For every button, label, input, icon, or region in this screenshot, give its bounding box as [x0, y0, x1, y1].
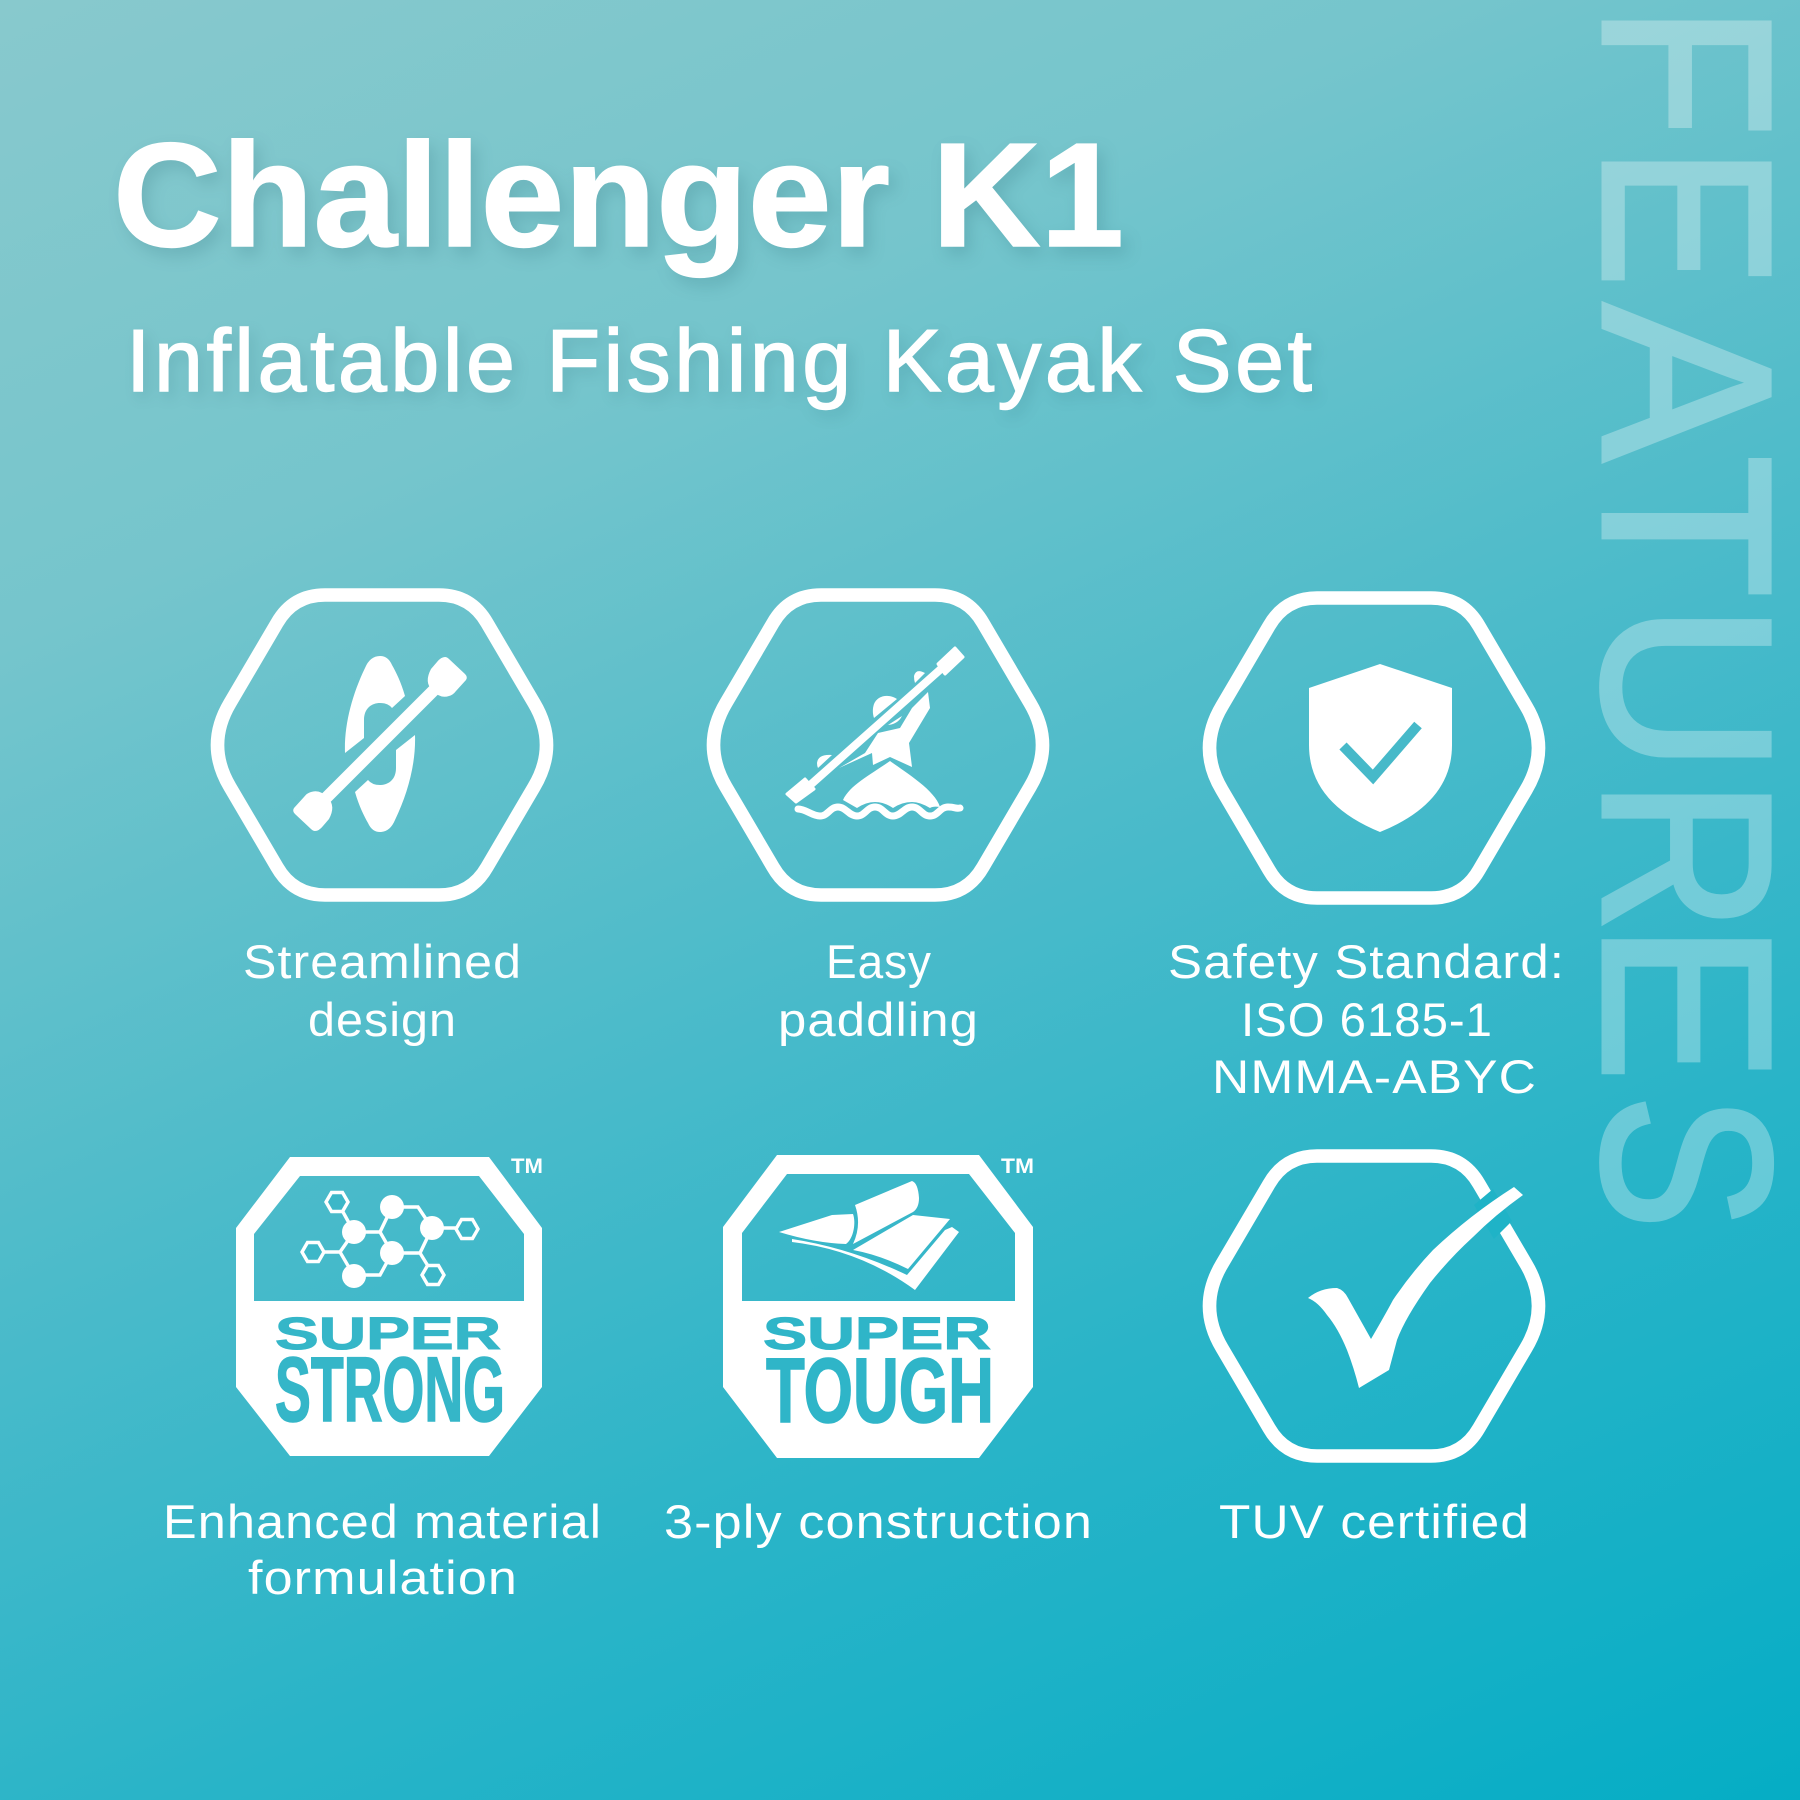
badge word: STRONG: STRONG	[275, 1339, 505, 1441]
icon: kayak and paddle	[218, 595, 546, 895]
label line 2: design	[308, 993, 457, 1046]
label line 2: paddling	[778, 993, 979, 1046]
vertical heading: FEATURES	[1552, 5, 1800, 1229]
icon: shield with check	[1210, 598, 1538, 898]
icon: paddler in kayak	[714, 595, 1042, 895]
feature: easy paddling	[714, 595, 1042, 1046]
label: 3-ply construction	[664, 1495, 1093, 1548]
label line 2: formulation	[248, 1551, 518, 1604]
label: TUV certified	[1219, 1495, 1530, 1548]
feature: safety standard	[1168, 598, 1565, 1103]
title: Challenger K1	[113, 113, 1124, 278]
badge word: SUPER: SUPER	[763, 1308, 991, 1359]
icon: hexagon with checkmark	[1210, 1156, 1538, 1456]
subtitle: Inflatable Fishing Kayak Set	[126, 311, 1312, 410]
label: Safety Standard:	[1168, 935, 1565, 988]
feature: TUV certified	[1210, 1156, 1538, 1548]
label: Enhanced material	[163, 1495, 602, 1548]
label line 3: NMMA-ABYC	[1212, 1050, 1537, 1103]
label line 2: ISO 6185-1	[1241, 993, 1493, 1046]
feature: enhanced material formulation	[163, 1155, 602, 1604]
trademark: TM	[1001, 1155, 1034, 1178]
label: Easy	[826, 935, 932, 988]
label: Streamlined	[243, 935, 522, 988]
feature: 3-ply construction	[664, 1155, 1093, 1548]
icon: super strong badge	[236, 1155, 543, 1456]
trademark: TM	[511, 1155, 543, 1178]
badge word: SUPER: SUPER	[275, 1308, 501, 1359]
layered material graphic	[779, 1181, 959, 1290]
icon: super tough badge	[723, 1155, 1034, 1458]
feature: streamlined design	[218, 595, 546, 1046]
badge word: TOUGH: TOUGH	[766, 1340, 994, 1442]
molecule graphic	[302, 1192, 478, 1288]
